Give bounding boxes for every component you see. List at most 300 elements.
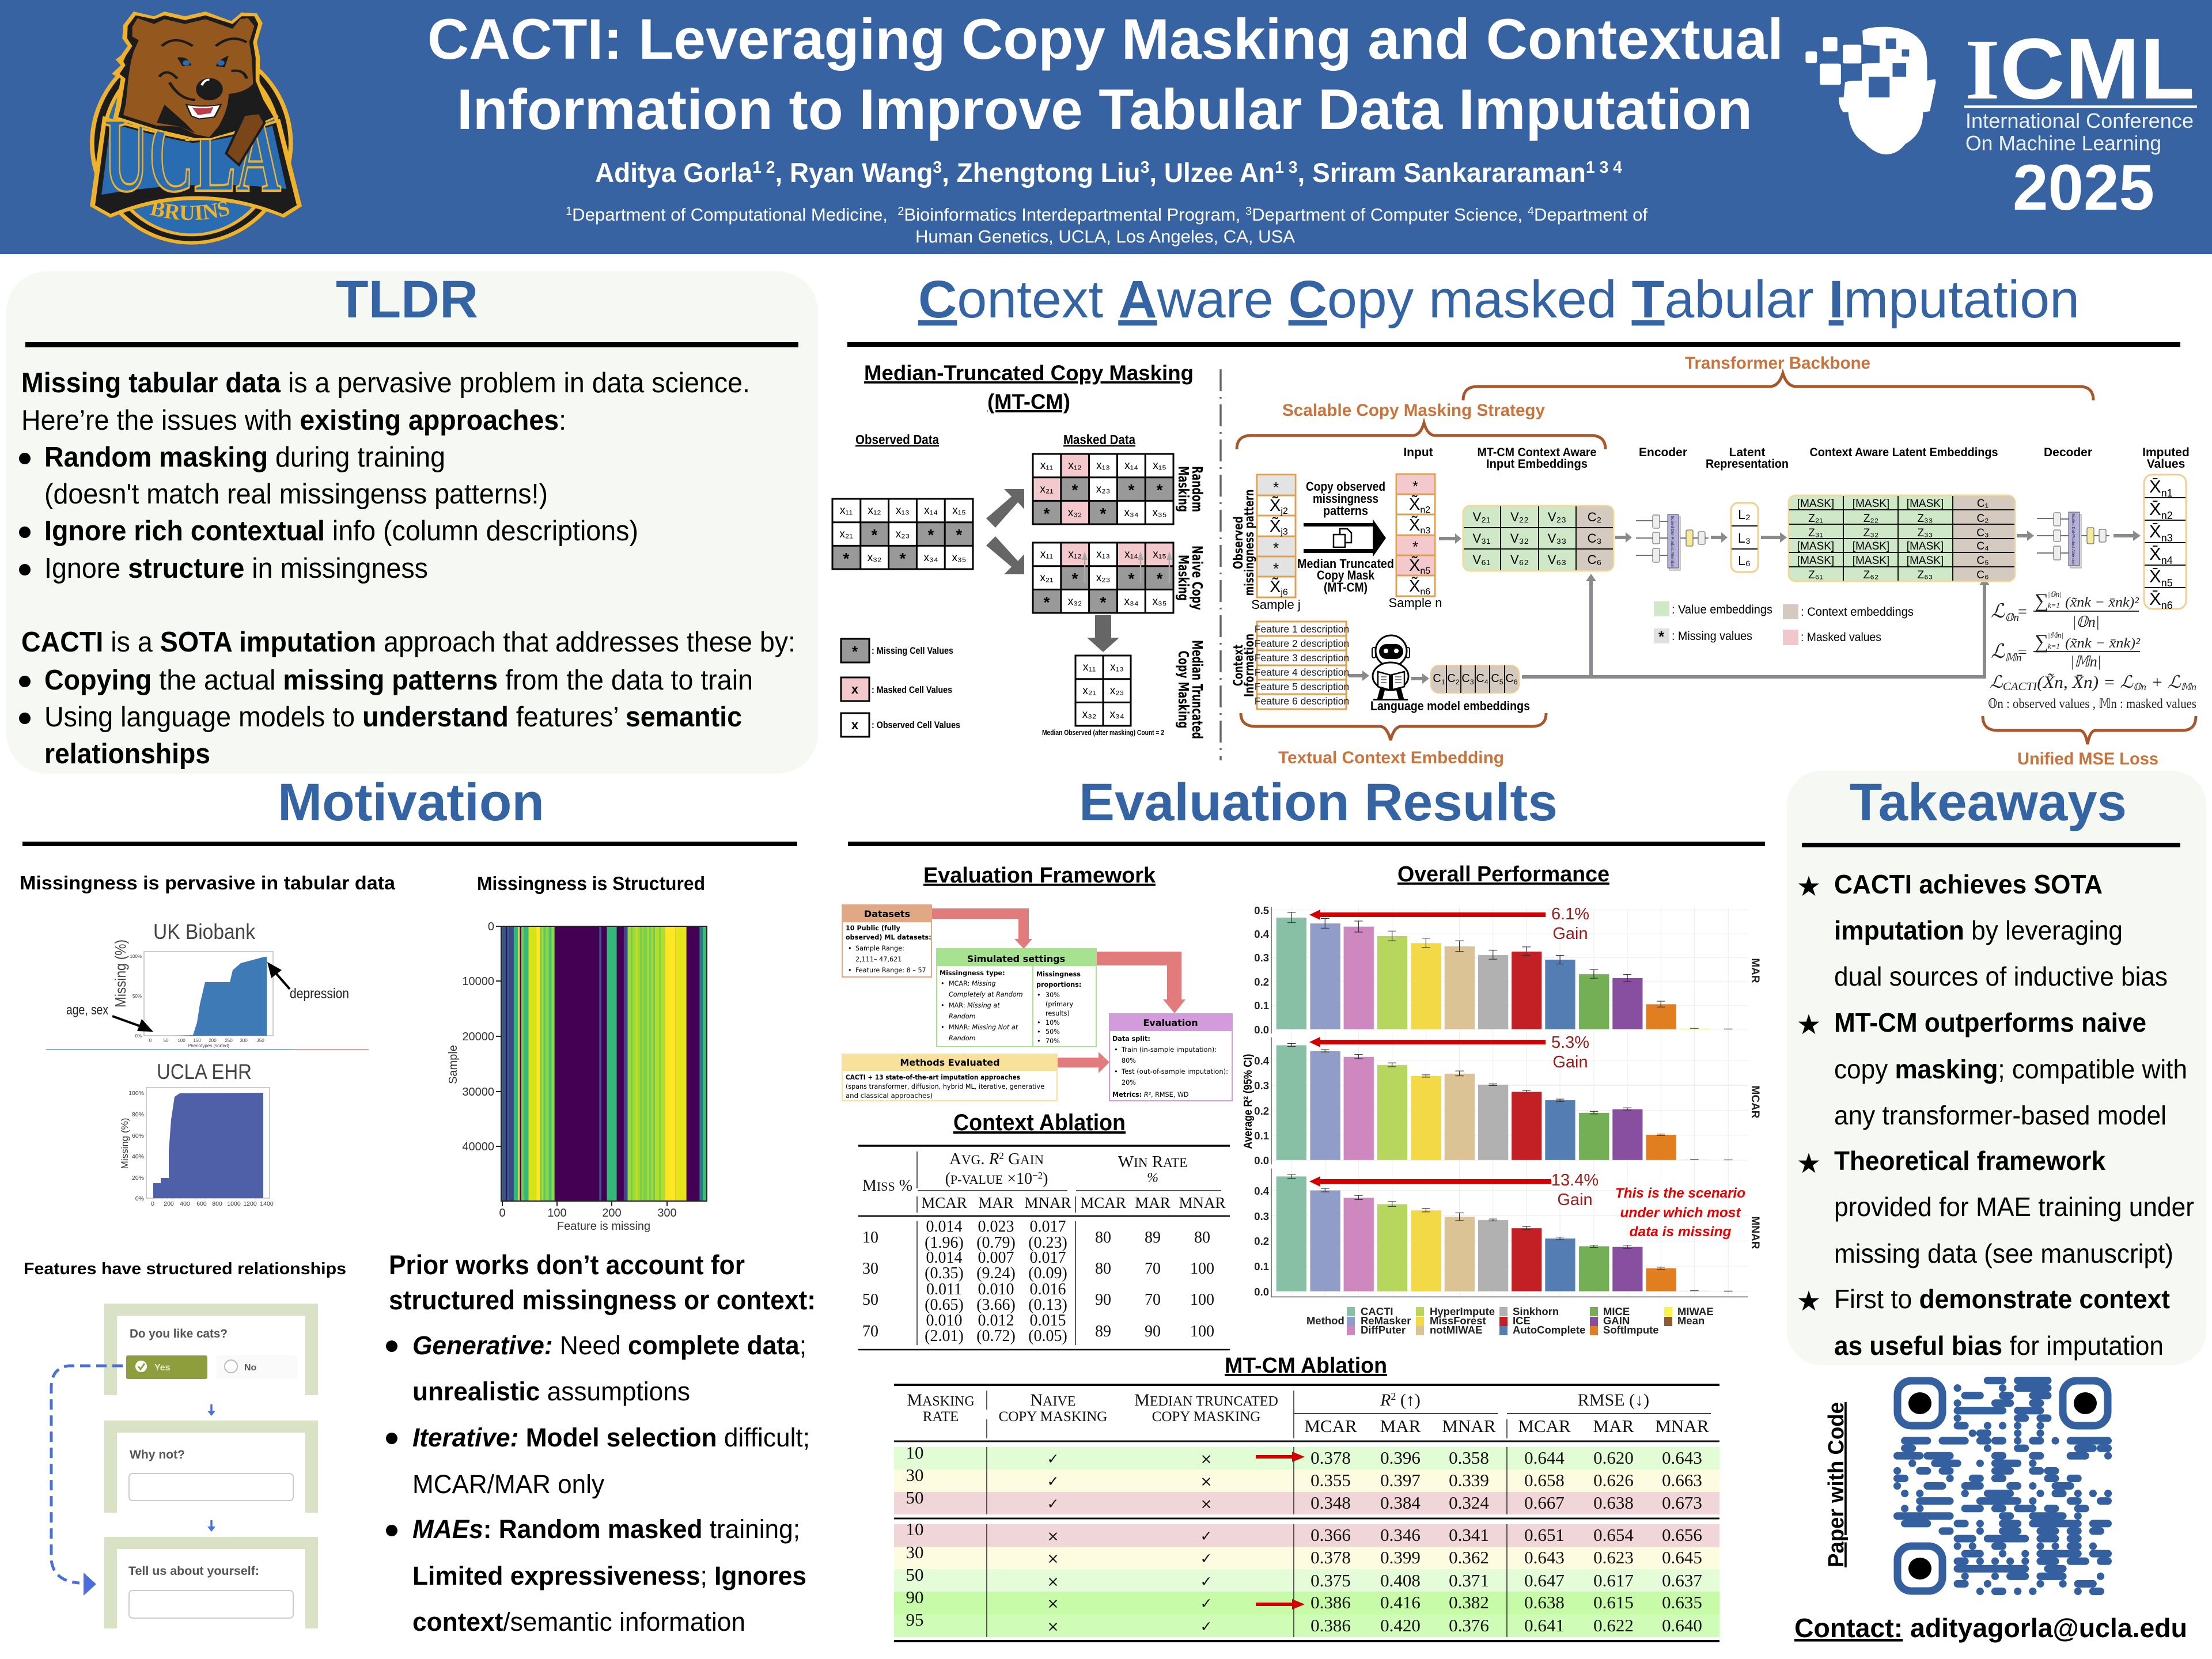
text block: prior works: context/semantic information: [412, 1607, 745, 1637]
context-aware latent embeddings: Z₃₁: [1808, 527, 1823, 539]
loss formulas: k=1: [2048, 601, 2060, 609]
table: MT-CM ablation: 0.371: [1449, 1570, 1489, 1590]
context-aware latent embeddings: Z₆₂: [1863, 569, 1878, 581]
box: Methods Evaluated: Methods Evaluated: [900, 1057, 1000, 1068]
box: Datasets: •: [848, 945, 852, 952]
text block: prior works: Prior works don’t account for: [389, 1249, 745, 1280]
ICML wordmark: ICML: [1965, 20, 2195, 118]
figure: survey form: Why not?: [130, 1448, 185, 1461]
table: MT-CM ablation: MASKING: [907, 1391, 975, 1410]
box: Simulated settings: 50%: [1046, 1028, 1060, 1036]
median truncated grid: x₂₁: [1082, 685, 1096, 697]
random masking grid: *: [1157, 481, 1163, 499]
table: MT-CM ablation: ✓: [1200, 1618, 1212, 1635]
box: Simulated settings: Random: [949, 1013, 976, 1020]
header banner: [0, 0, 2212, 254]
context-aware latent embeddings: Z₃₃: [1917, 513, 1933, 525]
table: MT-CM ablation: 0.396: [1380, 1448, 1421, 1468]
table: MT-CM ablation: 0.348: [1310, 1493, 1351, 1513]
embeddings legend: : Value embeddings: [1672, 603, 1772, 616]
sample j column: [1251, 475, 1301, 612]
table: MT-CM ablation: ×: [1200, 1473, 1212, 1490]
observed data grid: x₃₂: [868, 552, 881, 564]
table: context ablation: 50: [862, 1291, 878, 1309]
authors: Aditya Gorla: [595, 157, 756, 188]
table: context ablation: 0.017: [1030, 1218, 1066, 1236]
input embeddings table: C₂: [1588, 510, 1601, 524]
ICML wordmark: 2025: [2013, 151, 2154, 224]
table: MT-CM ablation: 0.358: [1449, 1448, 1489, 1468]
random masking grid: [1033, 454, 1173, 524]
rotated masking labels: Copy Masking: [1175, 651, 1192, 728]
chart: UCLA EHR: 20%: [132, 1175, 144, 1181]
latent representation: L₆: [1738, 553, 1751, 568]
observed data grid: x₃₄: [924, 552, 938, 564]
table: context ablation: WIN RATE: [1118, 1153, 1187, 1171]
affiliations: Human Genetics, UCLA, Los Angeles, CA, USA: [915, 226, 1295, 247]
feature descriptions list: [1255, 622, 1349, 709]
table: MT-CM ablation: 0.617: [1593, 1570, 1634, 1590]
imputed values column: n3: [2161, 532, 2173, 544]
sample n column: Sample n: [1389, 596, 1442, 610]
stage labels: MT-CM Context Aware: [1477, 446, 1597, 459]
naive copy masking grid: x₁₃: [1096, 548, 1110, 560]
TLDR text block: (doesn't match real missingenss patterns!): [44, 479, 548, 510]
context-aware latent embeddings: [MASK]: [1797, 498, 1834, 510]
naive copy masking grid: x₁₂: [1068, 548, 1082, 560]
chart: UCLA EHR: 1400: [260, 1200, 274, 1207]
brace labels: Unified MSE Loss: [2017, 749, 2158, 768]
loss formulas: (X̃n, X̄n) = ℒ: [2037, 673, 2134, 692]
table: context ablation: 0.016: [1030, 1281, 1066, 1298]
table: MT-CM ablation: 0.408: [1380, 1570, 1421, 1590]
table: MT-CM ablation: 30: [906, 1465, 924, 1485]
language model embeddings strip: 3: [1470, 678, 1474, 686]
affiliations: 1: [566, 205, 572, 218]
table: MT-CM ablation: 0.346: [1380, 1525, 1421, 1545]
chart: missingness heatmap: 30000: [462, 1086, 494, 1099]
table: MT-CM ablation: 0.382: [1449, 1592, 1489, 1612]
random masking grid: x₁₂: [1068, 460, 1082, 472]
figure: survey form: No: [244, 1363, 257, 1373]
chart legend: MIWAE: [1677, 1305, 1714, 1317]
embeddings legend: : Missing values: [1672, 630, 1752, 643]
box: Simulated settings: •: [1037, 1028, 1041, 1036]
chart: UCLA EHR: 0: [151, 1200, 154, 1207]
affiliations: 2: [897, 205, 904, 218]
naive copy masking grid: *: [1100, 593, 1107, 611]
median truncated grid: x₁₁: [1083, 661, 1096, 673]
column labels: Masked Data: [1063, 432, 1135, 447]
sample n column: X̃: [1409, 556, 1420, 575]
box: Simulated settings: •: [941, 980, 945, 987]
random masking grid: x₁₁: [1040, 460, 1053, 472]
observed data grid: *: [956, 526, 963, 544]
table: MT-CM ablation: 0.384: [1380, 1493, 1421, 1513]
imputed values column: n6: [2161, 600, 2173, 611]
sample j column: j2: [1280, 506, 1288, 516]
table: context ablation: 70: [1145, 1291, 1161, 1309]
sample n column: X̃: [1409, 577, 1420, 596]
box: Simulated settings: Simulated settings: [967, 953, 1065, 964]
loss formulas: ℒ: [1991, 601, 2005, 622]
table: MT-CM ablation: 0.366: [1310, 1525, 1351, 1545]
chart legend: SoftImpute: [1603, 1324, 1659, 1336]
authors: , Ryan Wang: [775, 157, 933, 188]
naive copy masking grid: *: [1128, 570, 1135, 588]
subheading: Evaluation Framework: Evaluation Framework: [923, 863, 1156, 888]
random masking grid: x₂₃: [1096, 483, 1110, 495]
box: Datasets: Datasets: [864, 908, 910, 919]
table: context ablation: MISS %: [862, 1177, 912, 1195]
table: context ablation: 80: [1095, 1260, 1111, 1278]
box: Datasets: observed) ML datasets:: [846, 934, 931, 941]
y axis labels: 0.4: [1254, 1185, 1270, 1197]
stage labels: Latent: [1729, 446, 1766, 459]
table: MT-CM ablation: 0.339: [1449, 1470, 1489, 1490]
language model embeddings strip: C: [1491, 672, 1499, 685]
loss formulas: |𝕄n|: [2070, 653, 2101, 670]
box: Simulated settings: Completely at Random: [949, 991, 1023, 998]
observed data grid: x₁₃: [896, 505, 910, 517]
panel: MT-CM diagram: [832, 361, 1206, 739]
median truncated grid: x₁₃: [1110, 661, 1124, 673]
copy mask arrow with labels: [1297, 479, 1394, 594]
table: context ablation: 10: [862, 1229, 878, 1247]
takeaway items: CACTI achieves SOTA: [1834, 869, 2103, 899]
box: Datasets: 2,111– 47,621: [855, 956, 902, 963]
table: MT-CM ablation: ×: [1047, 1550, 1059, 1567]
table: MT-CM ablation: 0.324: [1449, 1493, 1489, 1513]
random masking grid: x₃₄: [1124, 507, 1139, 519]
table: MT-CM ablation: COPY MASKING: [1152, 1409, 1260, 1425]
TLDR text block: Ignore structure in missingness: [44, 553, 428, 584]
observed data grid: *: [872, 526, 878, 544]
stage labels: Representation: [1706, 457, 1789, 471]
ICML wordmark: [1964, 20, 2197, 224]
random masking grid: x₃₂: [1068, 507, 1082, 519]
rotated masking labels: Median Truncated: [1189, 640, 1206, 739]
box: Methods Evaluated: CACTI + 13 state-of-the-art imputation approaches: [846, 1074, 1020, 1081]
feature descriptions list: Feature 6 description: [1255, 695, 1349, 707]
context-aware latent embeddings: [MASK]: [1853, 498, 1889, 510]
language model embeddings strip: C: [1505, 672, 1514, 685]
chart: overall performance bars: MAR: [1749, 958, 1761, 983]
chart: UK Biobank: depression: [290, 986, 349, 1002]
takeaway items: ★: [1796, 1009, 1821, 1041]
table: MT-CM ablation: RATE: [923, 1409, 959, 1425]
stage labels: Input Embeddings: [1486, 457, 1588, 471]
table: context ablation: 80: [1194, 1229, 1210, 1247]
arrow: to naive copy masking: [986, 536, 1024, 574]
chart: overall performance bars: MCAR: [1749, 1085, 1761, 1119]
context-aware latent embeddings: C₆: [1976, 569, 1989, 581]
takeaway items: Theoretical framework: [1834, 1146, 2105, 1176]
loss formulas: 𝕄n: [2005, 652, 2021, 664]
chart: UK Biobank: age, sex: [66, 1002, 108, 1018]
table: MT-CM ablation: 2: [1391, 1391, 1396, 1402]
box: Simulated settings: 70%: [1046, 1037, 1060, 1045]
table: MT-CM ablation: 0.615: [1593, 1592, 1634, 1612]
box: Datasets: Feature Range: 8 – 57: [855, 967, 926, 974]
text block: prior works: structured missingness or context:: [389, 1285, 816, 1315]
table: MT-CM ablation: MCAR: [1518, 1416, 1571, 1436]
y axis labels: 0.2: [1254, 1105, 1269, 1117]
loss formulas: [1988, 590, 2196, 711]
y axis labels: 0.1: [1254, 1260, 1269, 1272]
stage labels: Input: [1403, 446, 1433, 459]
context-aware latent embeddings: [MASK]: [1907, 540, 1944, 552]
chart legend: AutoComplete: [1513, 1324, 1585, 1336]
context-aware latent embeddings: [MASK]: [1797, 540, 1834, 552]
table: MT-CM ablation: 10: [906, 1442, 924, 1463]
chart: UCLA EHR: 200: [164, 1200, 174, 1207]
table: MT-CM ablation: 0.641: [1524, 1615, 1565, 1635]
table: MT-CM ablation: (↑): [1396, 1391, 1421, 1410]
y axis labels: 0.2: [1254, 976, 1269, 988]
feature descriptions list: Feature 1 description: [1255, 623, 1349, 635]
chart: missingness heatmap: 200: [602, 1207, 622, 1219]
heading: Motivation: Motivation: [278, 773, 544, 832]
column labels: [855, 432, 1135, 447]
table: MT-CM ablation: 0.626: [1593, 1470, 1634, 1490]
box: Datasets: •: [848, 967, 852, 974]
observed data grid: *: [900, 550, 906, 567]
chart legend: ICE: [1513, 1315, 1531, 1327]
callout: scenario note: under which most: [1620, 1205, 1741, 1221]
sample n column: X̃: [1409, 516, 1420, 535]
loss formulas: |𝕆n|: [2048, 590, 2062, 599]
table: context ablation: 0.011: [926, 1281, 962, 1298]
panel: TLDR: [6, 270, 818, 774]
sample n column: *: [1412, 538, 1418, 555]
naive copy masking grid: *: [1157, 570, 1163, 588]
table: context ablation: (0.09): [1028, 1264, 1067, 1282]
table: context ablation: 80: [1095, 1229, 1111, 1247]
table: context ablation: (9.24): [976, 1264, 1016, 1282]
input embeddings table: V₂₂: [1510, 510, 1529, 524]
embeddings legend: [1654, 601, 1914, 645]
copy mask arrow with labels: Copy Mask: [1317, 568, 1375, 582]
context-aware latent embeddings: [MASK]: [1907, 555, 1944, 567]
chart: UCLA EHR: 800: [212, 1200, 222, 1207]
copy mask arrow with labels: Copy observed: [1306, 479, 1385, 494]
takeaway items: as useful bias for imputation: [1834, 1331, 2164, 1361]
table: MT-CM ablation: ✓: [1200, 1550, 1212, 1567]
table: context ablation: MCAR: [921, 1194, 967, 1211]
table: MT-CM ablation: 0.654: [1593, 1525, 1634, 1545]
context-aware latent embeddings: [1789, 495, 2015, 581]
authors: , Sriram Sankararaman: [1298, 157, 1586, 188]
subheading: pervasive: Missingness is pervasive in tabular data: [20, 872, 396, 893]
imputed values column: X̄: [2149, 476, 2161, 497]
context-aware latent embeddings: [MASK]: [1797, 555, 1834, 567]
box: Evaluation: 80%: [1122, 1057, 1136, 1065]
box: Methods Evaluated: (spans transformer, diffusion, hybrid ML, iterative, generative: [846, 1083, 1044, 1090]
language model embeddings strip: C: [1476, 672, 1484, 685]
y axis labels: 0.1: [1254, 999, 1269, 1012]
chart: UK Biobank: 100%: [130, 954, 142, 959]
panel: CACTI architecture: [1232, 354, 2196, 768]
box: Simulated settings: Missingness: [1036, 971, 1081, 978]
takeaway items: ★: [1796, 1147, 1821, 1180]
table: MT-CM ablation: MNAR: [1655, 1416, 1709, 1436]
loss formulas: =: [2018, 603, 2027, 621]
y axis labels: 0.0: [1254, 1154, 1269, 1166]
table: MT-CM ablation: 0.420: [1380, 1615, 1421, 1635]
box: Simulated settings: [937, 949, 1096, 1047]
table: MT-CM ablation: 0.341: [1449, 1525, 1489, 1545]
label: language model embeddings: Language model embeddings: [1370, 699, 1530, 713]
language model embeddings strip: 6: [1514, 678, 1518, 686]
naive copy masking grid: x₂₁: [1040, 572, 1054, 584]
random masking grid: x₂₁: [1040, 483, 1054, 495]
language model embeddings strip: 1: [1441, 678, 1445, 686]
chart: UCLA EHR: 1200: [243, 1200, 257, 1207]
rotated masking labels: Random: [1189, 466, 1206, 512]
affiliations: Department of Computer Science,: [1252, 204, 1528, 225]
random masking grid: x₁₅: [1153, 460, 1166, 472]
icon: robot reading: [1372, 635, 1410, 700]
naive copy masking grid: x₁₄: [1124, 548, 1138, 560]
chart: UK Biobank: 0%: [135, 1033, 142, 1039]
bars: MCAR: [1276, 1045, 1733, 1160]
caption: median observed count: Median Observed (after masking) Count = 2: [1042, 728, 1164, 737]
box: Datasets: 10 Public (fully: [846, 925, 900, 932]
stage labels: Decoder: [2044, 446, 2092, 459]
text block: prior works: Iterative: Model selection difficult;: [412, 1423, 810, 1452]
table: context ablation: 2: [999, 1150, 1004, 1161]
chart legend: CACTI: [1361, 1305, 1393, 1317]
context-aware latent embeddings: C₅: [1976, 555, 1989, 567]
table: context ablation: (0.05): [1028, 1327, 1067, 1345]
affiliations: Department of Computational Medicine,: [572, 204, 897, 225]
box: Simulated settings: •: [941, 1002, 945, 1009]
context-aware latent embeddings: Z₃₂: [1863, 527, 1878, 539]
subheading: Context Ablation: Context Ablation: [953, 1110, 1126, 1135]
imputed values column: n4: [2161, 555, 2173, 566]
logo: ICML head: [1805, 27, 1936, 154]
takeaway items: First to demonstrate context: [1834, 1284, 2170, 1314]
table: MT-CM ablation: RMSE (↓): [1578, 1391, 1649, 1410]
table: MT-CM ablation: 0.645: [1662, 1547, 1702, 1567]
observed data grid: x₁₄: [924, 505, 938, 517]
sample n column: *: [1412, 478, 1418, 495]
table: MT-CM ablation: 0.640: [1662, 1615, 1702, 1635]
affiliations: [566, 204, 1647, 247]
naive copy masking grid: *: [1044, 593, 1050, 611]
takeaway items: dual sources of inductive bias: [1834, 961, 2168, 991]
language model embeddings strip: 5: [1499, 678, 1503, 686]
imputed values column: X̄: [2149, 544, 2161, 564]
chart: UK Biobank: 250: [225, 1038, 233, 1043]
chart: missingness heatmap: 0: [488, 921, 494, 933]
table: MT-CM ablation: 0.376: [1449, 1615, 1489, 1635]
table: context ablation: 0.012: [978, 1312, 1014, 1330]
table: MT-CM ablation: 50: [906, 1565, 924, 1585]
chart legend: MICE: [1603, 1305, 1630, 1317]
loss formulas: ℒ: [1991, 641, 2005, 662]
box: Methods Evaluated: and classical approaches): [846, 1092, 933, 1100]
chart: UK Biobank: 300: [240, 1038, 248, 1043]
copy mask arrow with labels: Median Truncated: [1297, 556, 1394, 571]
table: MT-CM ablation: 0.355: [1310, 1470, 1351, 1490]
box: Evaluation: •: [1114, 1046, 1118, 1054]
imputed values column: X̄: [2149, 521, 2161, 541]
random masking grid: *: [1128, 481, 1135, 499]
table: context ablation: −2: [1032, 1170, 1043, 1181]
decoder block: Scaled Dot-Product Attention: [2071, 513, 2075, 565]
affiliations: Bioinformatics Interdepartmental Program,: [904, 204, 1245, 225]
table: MT-CM ablation: ✓: [1047, 1450, 1059, 1467]
chart: UCLA EHR: 80%: [132, 1111, 144, 1118]
table: MT-CM ablation: MCAR: [1304, 1416, 1357, 1436]
context-aware latent embeddings: Z₂₁: [1808, 513, 1823, 525]
input embeddings table: V₆₂: [1510, 552, 1529, 567]
table: MT-CM ablation: MEDIAN TRUNCATED: [1134, 1391, 1278, 1410]
input embeddings table: V₆₃: [1548, 552, 1566, 567]
input embeddings table: V₃₁: [1472, 531, 1491, 546]
table: MT-CM ablation: 0.416: [1380, 1592, 1421, 1612]
table: MT-CM ablation: 0.362: [1449, 1547, 1489, 1567]
chart: UK Biobank: UK Biobank: [153, 920, 255, 944]
context-aware latent embeddings: Z₂₂: [1863, 513, 1878, 525]
braces: [1237, 373, 2196, 744]
table: MT-CM ablation: ✓: [1047, 1495, 1059, 1512]
sample n column: [1389, 474, 1442, 610]
loss formulas: |𝕄n|: [2048, 631, 2063, 639]
sample j column: X̃: [1270, 578, 1281, 596]
table: MT-CM ablation: 0.378: [1310, 1448, 1351, 1468]
error bars: [1287, 912, 1732, 1291]
y axis labels: 0.3: [1254, 1080, 1269, 1092]
loss formulas: ∑: [2035, 631, 2048, 653]
box: Simulated settings: MAR: Missing at: [949, 1002, 1000, 1009]
sample n column: n5: [1420, 566, 1430, 576]
sample j column: *: [1273, 539, 1279, 556]
random masking grid: *: [1100, 505, 1107, 522]
context-aware latent embeddings: [MASK]: [1907, 498, 1944, 510]
table: MT-CM ablation: MAR: [1593, 1416, 1634, 1436]
sample j column: j6: [1280, 588, 1288, 597]
authors: 1 3: [1275, 158, 1298, 177]
chart: overall performance bars: Gain: [1552, 925, 1588, 943]
cell legend: : Masked Cell Values: [872, 684, 952, 695]
rotated masking labels: [1175, 466, 1206, 739]
feature descriptions list: Feature 5 description: [1255, 681, 1349, 692]
language model embeddings strip: C: [1433, 672, 1441, 685]
median truncated grid: [1075, 656, 1131, 726]
rotated masking labels: Masking: [1175, 466, 1192, 512]
TLDR text block: Here’re the issues with existing approaches:: [21, 405, 566, 436]
table: context ablation: 70: [862, 1323, 878, 1340]
chart: overall performance bars: Average R² (95% CI): [1242, 1054, 1255, 1149]
text block: prior works: MCAR/MAR only: [412, 1469, 604, 1499]
table: context ablation: 89: [1095, 1323, 1111, 1340]
language model embeddings strip: C: [1461, 672, 1470, 685]
arrow: to random masking: [986, 489, 1024, 528]
table: MT-CM ablation: 0.397: [1380, 1470, 1421, 1490]
chart legend: Mean: [1677, 1315, 1705, 1327]
text block: prior works: MAEs: Random masked training;: [412, 1514, 800, 1544]
chart: UCLA EHR: 600: [196, 1200, 207, 1207]
table: MT-CM ablation: ×: [1047, 1573, 1059, 1590]
table: context ablation: (0.72): [976, 1327, 1016, 1345]
chart: UCLA EHR: 1000: [227, 1200, 241, 1207]
MT-CM heading: [864, 361, 1194, 414]
table: MT-CM ablation: 0.638: [1593, 1493, 1634, 1513]
table: MT-CM ablation: ✓: [1200, 1528, 1212, 1544]
